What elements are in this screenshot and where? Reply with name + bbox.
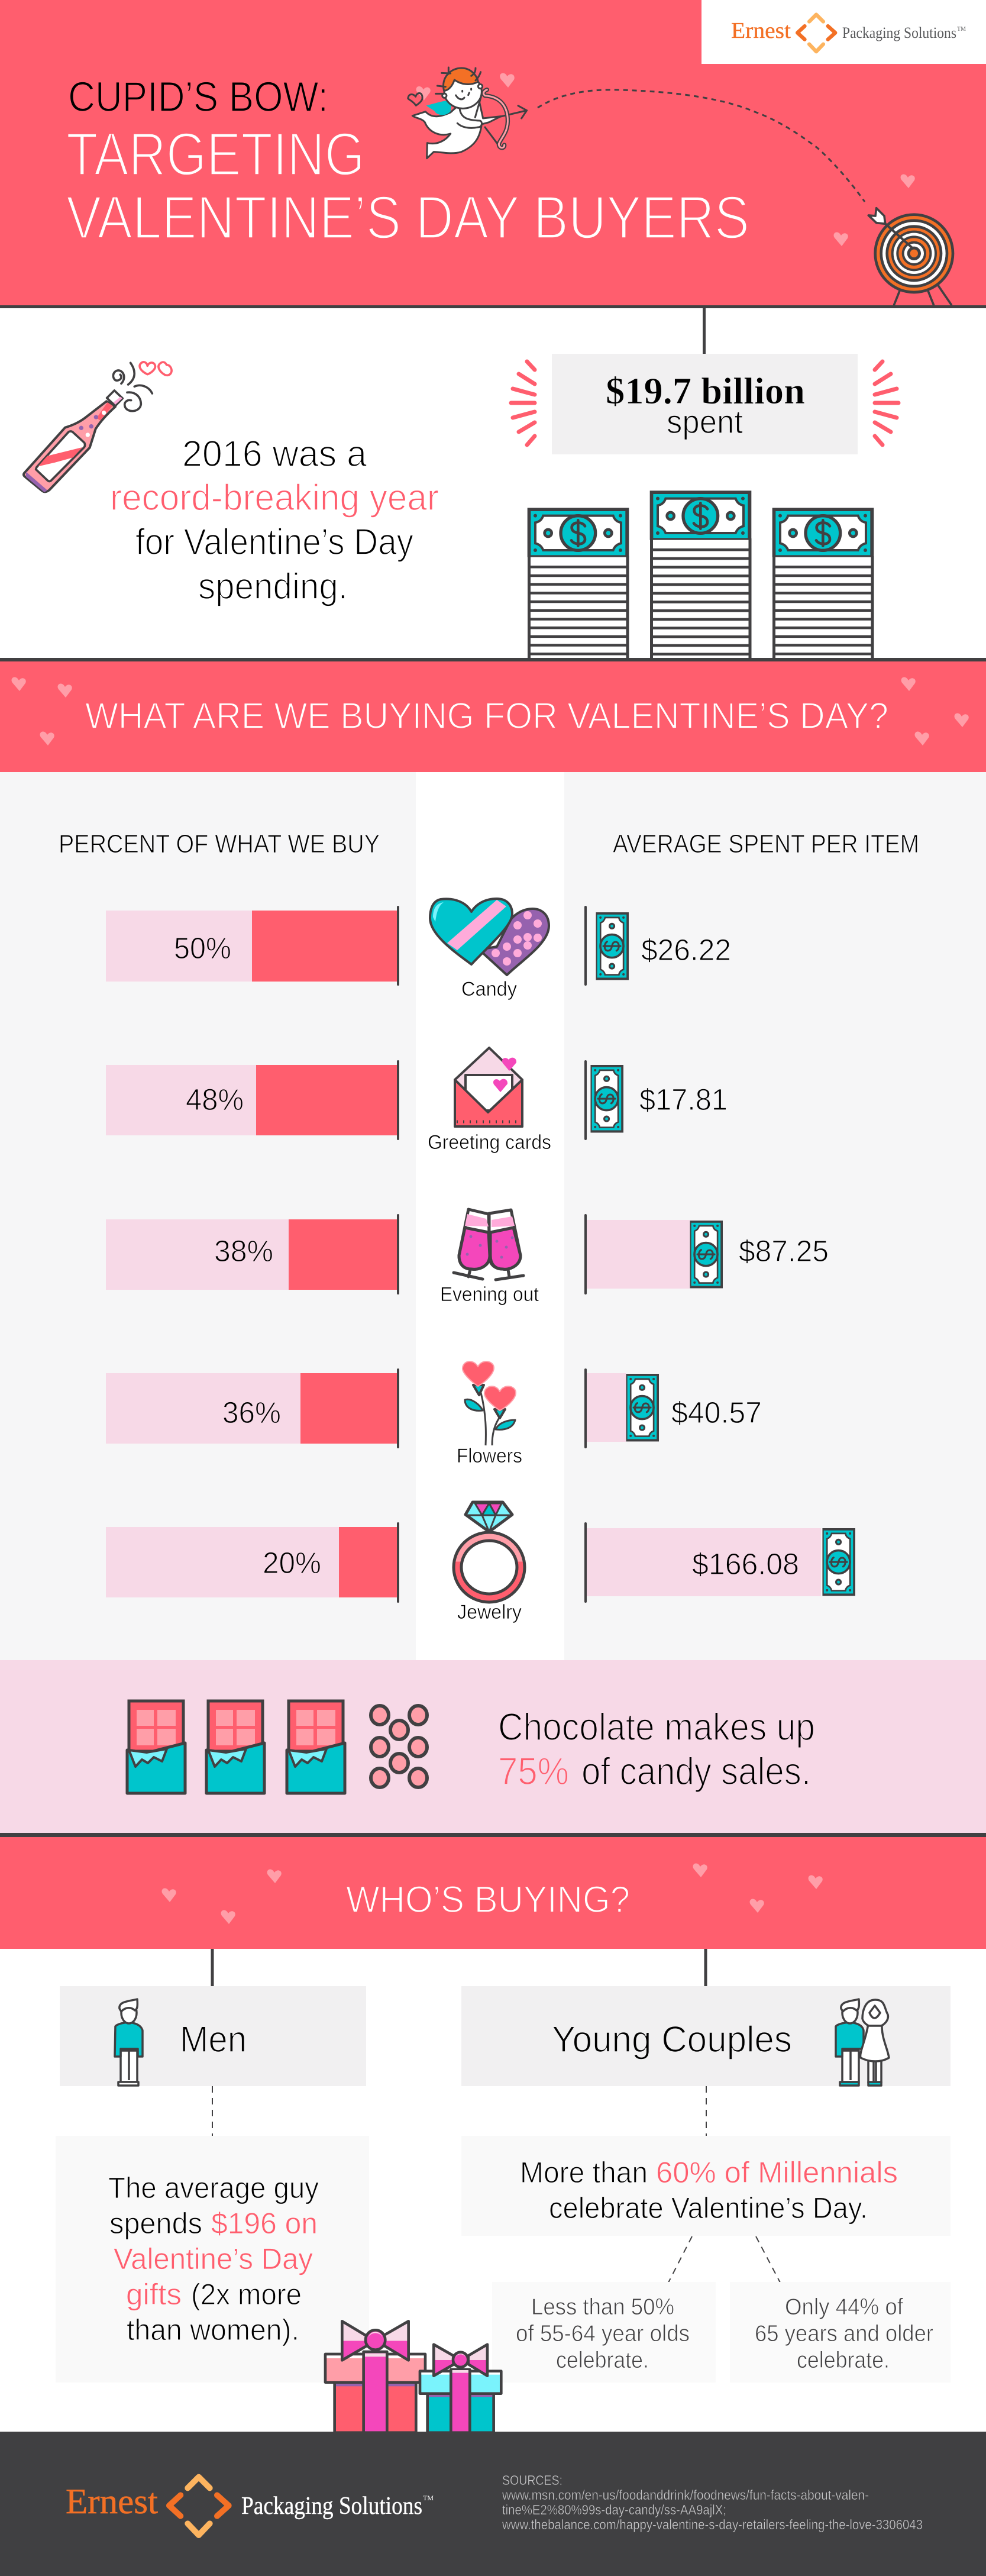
panel: 65+ fact: 65 years and older (755, 2321, 933, 2346)
panel: average spent per item (564, 772, 986, 1660)
icon: champagne glasses (454, 1209, 523, 1280)
sources: www.msn.com/en-us/foodanddrink/foodnews/fun-facts-about-valen- (502, 2487, 869, 2503)
sunburst ticks (511, 361, 898, 445)
men fact text: $196 on (211, 2207, 318, 2240)
young couples label: Young Couples (552, 2019, 792, 2060)
panel: 55-64 fact: celebrate. (556, 2348, 649, 2373)
panel: 65+ fact: celebrate. (797, 2348, 890, 2373)
record text (110, 434, 439, 607)
icon: cupid (408, 67, 527, 159)
logo box: Packaging Solutions (842, 24, 956, 41)
sources (502, 2472, 923, 2532)
row: greeting cards $17.81: $17.81 (639, 1083, 728, 1116)
chocolate text (498, 1705, 815, 1793)
stack 3 (772, 508, 874, 658)
label: jewelry: Jewelry (457, 1601, 522, 1623)
dashed connectors (212, 2086, 780, 2283)
row: candy $26.22: $26.22 (641, 933, 731, 967)
bar: candy 50%: 50% (174, 931, 231, 965)
men fact text: (2x more (191, 2278, 302, 2311)
men fact text: spends (109, 2207, 202, 2240)
sources: www.thebalance.com/happy-valentine-s-day-retailers-feeling-the-love-3306043 (502, 2517, 923, 2532)
panel: millennials fact: More than (520, 2156, 648, 2189)
men fact text: The average guy (108, 2171, 319, 2204)
dashed arrow flight path (538, 90, 865, 202)
panel: spending callout (511, 354, 898, 454)
panel: 65+ fact (730, 2282, 951, 2383)
title (66, 74, 749, 251)
row: candy $26.22 (584, 906, 731, 986)
panel: 55-64 fact: Less than 50% (531, 2294, 674, 2320)
section band: what are we buying (0, 658, 986, 772)
column heading: PERCENT OF WHAT WE BUY (59, 829, 380, 858)
panel: record year (24, 362, 439, 607)
bar: jewelry 20%: 20% (263, 1546, 321, 1580)
stack 1 (528, 508, 629, 658)
footer logo (66, 2477, 434, 2535)
panel: chocolate stat (0, 1660, 986, 1833)
panel: young couples (461, 1986, 951, 2086)
panel: millennials fact: celebrate Valentine’s Day. (549, 2191, 868, 2225)
icon: champagne bottle (24, 362, 172, 492)
bar: jewelry 20% (106, 1522, 399, 1603)
sources: SOURCES: (502, 2472, 562, 2488)
label: flowers: Flowers (457, 1445, 522, 1467)
spending figure: $19.7 billion (606, 370, 805, 412)
panel: 65+ fact: Only 44% of (785, 2294, 903, 2320)
footer logo: Ernest (66, 2482, 158, 2521)
footer (0, 2432, 986, 2576)
section heading: WHO’S BUYING? (346, 1879, 630, 1920)
row: jewelry $166.08 (584, 1522, 855, 1603)
row: evening out $87.25: $87.25 (739, 1234, 829, 1268)
row: flowers $40.57 (584, 1368, 762, 1448)
hearts (500, 74, 915, 246)
label: greeting cards: Greeting cards (428, 1131, 551, 1154)
icon: money stacks (528, 490, 874, 658)
stack 2 (650, 490, 751, 658)
title: TARGETING (66, 120, 365, 188)
bar: greeting cards 48% (106, 1060, 399, 1140)
bar: evening out 38%: 38% (214, 1234, 273, 1268)
bar: candy 50% (106, 906, 399, 986)
bar: flowers 36%: 36% (222, 1396, 281, 1429)
icon: gift boxes (325, 2321, 501, 2433)
bar: greeting cards 48%: 48% (186, 1083, 244, 1116)
chocolate text: 75% (498, 1749, 569, 1793)
panel: men (60, 1986, 366, 2086)
record text: for Valentine’s Day (135, 522, 413, 563)
panel: 55-64 fact (492, 2282, 716, 2383)
title: CUPID’S BOW: (68, 74, 328, 121)
title: VALENTINE’S DAY BUYERS (66, 183, 749, 251)
stem connector to spending box (703, 308, 706, 354)
men fact text: Valentine’s Day (114, 2242, 313, 2275)
logo box: Ernest (731, 18, 791, 43)
row: flowers $40.57: $40.57 (671, 1396, 762, 1429)
row: greeting cards $17.81 (584, 1060, 728, 1140)
section heading: WHAT ARE WE BUYING FOR VALENTINE’S DAY? (85, 696, 888, 737)
icon: couple (836, 1999, 889, 2086)
row: jewelry $166.08: $166.08 (692, 1547, 799, 1581)
sources: tine%E2%80%99s-day-candy/ss-AA9ajlX; (502, 2502, 726, 2517)
bar: flowers 36% (106, 1368, 399, 1448)
panel: millennials fact: 60% of Millennials (656, 2156, 898, 2189)
record text: 2016 was a (182, 434, 367, 474)
spent label: spent (667, 403, 743, 440)
icon: candy hearts (430, 899, 549, 975)
men fact text: than women). (127, 2313, 299, 2346)
icon: candy pieces (371, 1706, 427, 1787)
logo box: TM (957, 26, 966, 33)
panel: millennials fact (461, 2136, 951, 2236)
icon: chocolate bars (127, 1701, 345, 1793)
connectors (212, 1949, 706, 1986)
icon: diamond ring (454, 1502, 525, 1602)
icon: target (868, 208, 954, 305)
record text: spending. (198, 566, 348, 607)
chocolate text: of candy sales. (581, 1749, 811, 1793)
panel: item icons column (416, 772, 564, 1660)
label: candy: Candy (461, 978, 517, 1000)
icon: envelope (455, 1048, 522, 1126)
men fact text (108, 2171, 319, 2346)
footer logo: Packaging Solutions (241, 2493, 422, 2520)
chocolate text: Chocolate makes up (498, 1705, 815, 1748)
bar: evening out 38% (106, 1214, 399, 1295)
section band: who's buying (0, 1833, 986, 1949)
panel: men fact (56, 2136, 369, 2383)
column heading: AVERAGE SPENT PER ITEM (613, 829, 919, 858)
record text: record-breaking year (110, 477, 439, 518)
men fact text: gifts (126, 2278, 182, 2311)
header panel (0, 0, 986, 308)
icon: flowers (463, 1361, 516, 1445)
panel: percent of what we buy (0, 772, 416, 1660)
label: evening out: Evening out (440, 1283, 539, 1306)
icon: man (115, 1999, 143, 2086)
panel: 55-64 fact: of 55-64 year olds (516, 2321, 690, 2346)
footer logo: TM (423, 2494, 434, 2502)
row: evening out $87.25 (584, 1214, 829, 1295)
logo box (701, 0, 986, 64)
men label: Men (180, 2019, 247, 2060)
